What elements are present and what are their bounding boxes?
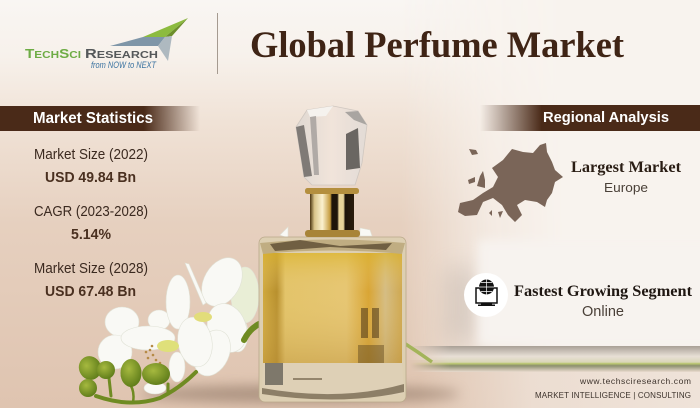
illustration: orchid flowers xyxy=(75,227,432,403)
text: fastest growing segment: Fastest Growing Segment xyxy=(514,283,693,300)
heading: market statistics xyxy=(0,106,200,131)
flower centres xyxy=(145,312,212,364)
panel: fastest growing background xyxy=(446,240,700,346)
bottle cap xyxy=(296,106,367,185)
logo: TechSci Research: from NOW to NEXT xyxy=(91,60,157,70)
heading: regional analysis: Regional Analysis xyxy=(543,109,669,126)
text: fastest growing segment: Online xyxy=(582,304,624,320)
logo: TechSci Research xyxy=(25,18,188,70)
stat: market size 2028: USD 67.48 Bn xyxy=(45,283,136,300)
buds xyxy=(75,352,170,397)
gold collar xyxy=(305,188,360,237)
stat: market size 2022: Market Size (2022) xyxy=(34,147,148,163)
icon: Europe map xyxy=(458,143,563,222)
stat: market size 2028: Market Size (2028) xyxy=(34,261,148,277)
heading: regional analysis xyxy=(480,105,700,131)
shadow under bottle and flowers xyxy=(140,385,460,403)
illustration: perfume bottle xyxy=(259,106,406,402)
stem right of bottle xyxy=(404,343,432,362)
text: largest market xyxy=(571,159,682,195)
stat: market size 2022: USD 49.84 Bn xyxy=(45,169,136,186)
stat: CAGR xyxy=(34,204,148,243)
footer text: www.techsciresearch.com xyxy=(579,376,691,386)
text: largest market: Europe xyxy=(604,180,648,195)
footer text xyxy=(535,376,691,400)
stem and branches xyxy=(96,323,261,403)
logo: TechSci Research: TECH SCI xyxy=(25,46,81,61)
panel: regional analysis xyxy=(458,105,700,320)
text: largest market: Largest Market xyxy=(571,159,682,176)
stat: market size 2028 xyxy=(34,261,148,300)
bottle body xyxy=(259,237,406,402)
stat: CAGR: CAGR (2023-2028) xyxy=(34,204,148,220)
footer text: MARKET INTELLIGENCE | CONSULTING xyxy=(535,391,691,400)
stat: market size 2022 xyxy=(34,147,148,186)
heading: market statistics: Market Statistics xyxy=(33,110,153,127)
title: Global Perfume Market xyxy=(250,25,625,66)
icon: online globe monitor xyxy=(464,273,508,317)
decorative band with green line xyxy=(410,346,700,372)
logo: TechSci Research: RESEARCH xyxy=(85,46,158,61)
text: fastest growing segment xyxy=(514,283,693,320)
petals xyxy=(98,227,372,394)
stat: CAGR: 5.14% xyxy=(71,226,111,243)
panel: market statistics xyxy=(0,106,200,300)
